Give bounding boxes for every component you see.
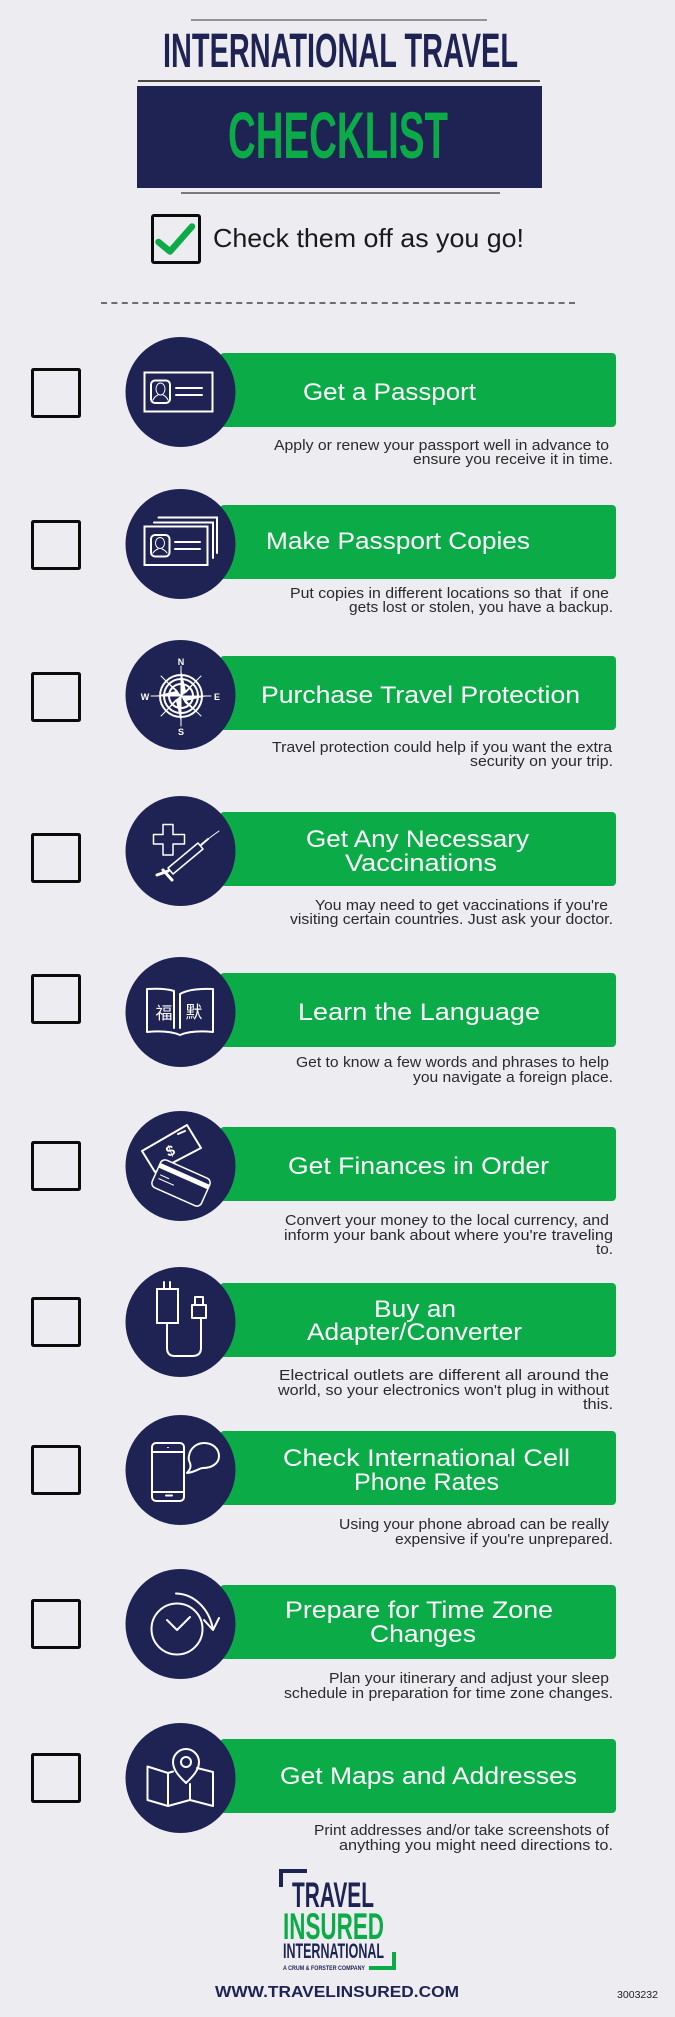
description: visiting certain countries. Just ask your doctor. bbox=[290, 911, 613, 928]
description: Travel protection could help if you want the extra bbox=[272, 739, 613, 756]
checkbox bbox=[32, 674, 80, 720]
description: You may need to get vaccinations if you're bbox=[315, 897, 608, 914]
item 10: get maps and addresses bbox=[32, 1723, 616, 1854]
icon: compass rose: N bbox=[178, 657, 184, 667]
checkbox bbox=[32, 976, 80, 1022]
description: inform your bank about where you're traveling bbox=[284, 1227, 613, 1244]
heading: Get Finances in Order bbox=[288, 1153, 549, 1180]
badge circle bbox=[126, 1267, 236, 1377]
heading: Buy an bbox=[374, 1296, 456, 1323]
green bar bbox=[220, 1431, 616, 1505]
checkbox bbox=[32, 1298, 80, 1346]
icon: banknote and credit card: $ bbox=[164, 1142, 178, 1161]
badge circle bbox=[126, 1569, 236, 1679]
title banner: checklist: CHECKLIST bbox=[228, 98, 448, 172]
description: expensive if you're unprepared. bbox=[395, 1531, 613, 1548]
badge circle bbox=[126, 957, 236, 1067]
checkbox bbox=[32, 834, 80, 882]
icon: open phrase book bbox=[147, 989, 213, 1035]
green bar bbox=[220, 353, 616, 427]
item 8: check international cell phone rates: Phone Rates bbox=[354, 1469, 499, 1496]
badge circle bbox=[126, 337, 236, 447]
icon: charger and cable bbox=[157, 1282, 206, 1356]
heading: Check International Cell bbox=[283, 1445, 570, 1472]
heading: Learn the Language bbox=[298, 999, 540, 1026]
icon: stacked passport cards bbox=[144, 518, 217, 565]
description: Using your phone abroad can be really bbox=[339, 1516, 610, 1533]
logo: travel insured international: TRAVEL bbox=[292, 1876, 374, 1915]
checkbox bbox=[32, 522, 80, 568]
green bar bbox=[220, 812, 616, 886]
logo: travel insured international: INTERNATIONAL bbox=[283, 1940, 384, 1963]
description: anything you might need directions to. bbox=[339, 1837, 613, 1854]
heading: Get Maps and Addresses bbox=[280, 1763, 577, 1790]
icon: compass rose: S bbox=[178, 727, 184, 737]
description: this. bbox=[583, 1396, 613, 1413]
instruction text: Check them off as you go! bbox=[213, 223, 524, 253]
item 4: get any necessary vaccinations bbox=[32, 796, 616, 928]
checkbox bbox=[32, 1142, 80, 1190]
item 1: get a passport bbox=[32, 337, 616, 468]
icon: phone and speech bubble bbox=[152, 1443, 219, 1501]
icon: open phrase book: 默 bbox=[186, 1003, 202, 1022]
icon: map and pin bbox=[148, 1749, 213, 1806]
badge circle bbox=[126, 640, 236, 750]
checkbox bbox=[32, 1446, 80, 1494]
icon: banknote and credit card bbox=[142, 1125, 212, 1208]
description: schedule in preparation for time zone changes. bbox=[284, 1685, 613, 1702]
item 3: purchase travel protection bbox=[32, 640, 616, 770]
description: Get to know a few words and phrases to help bbox=[296, 1054, 609, 1071]
item 7: buy an adapter/converter: Adapter/Converter bbox=[307, 1319, 522, 1346]
green bar bbox=[220, 656, 616, 730]
description: Apply or renew your passport well in advance to bbox=[274, 437, 609, 454]
badge circle bbox=[126, 489, 236, 599]
checkbox bbox=[32, 1600, 80, 1648]
heading: Get a Passport bbox=[303, 379, 476, 406]
description bbox=[314, 1822, 613, 1854]
icon: compass rose bbox=[141, 657, 220, 737]
logo: travel insured international: A CRUM & FORSTER COMPANY bbox=[283, 1965, 366, 1972]
item 6: get finances in order bbox=[32, 1111, 616, 1258]
green bar bbox=[220, 973, 616, 1047]
reference code: 3003232 bbox=[617, 1989, 658, 2001]
checkbox bbox=[32, 1754, 80, 1802]
item 9: prepare for time zone changes bbox=[32, 1569, 616, 1702]
description bbox=[290, 585, 613, 616]
green bar bbox=[220, 505, 616, 579]
badge circle bbox=[126, 1723, 236, 1833]
item 9: prepare for time zone changes: Changes bbox=[370, 1621, 476, 1648]
icon: clock with arrow bbox=[152, 1594, 219, 1654]
icon: medical cross and syringe bbox=[154, 824, 219, 880]
description bbox=[284, 1670, 613, 1702]
checkbox bbox=[32, 370, 80, 416]
heading: Make Passport Copies bbox=[266, 528, 530, 555]
logo: travel insured international: INSURED bbox=[283, 1906, 384, 1947]
description bbox=[339, 1516, 613, 1548]
icon: passport card bbox=[144, 372, 212, 412]
icon: open phrase book: 福 bbox=[156, 1004, 172, 1023]
description: world, so your electronics won't plug in without bbox=[277, 1382, 610, 1399]
icon: checked box bbox=[152, 216, 200, 262]
green bar bbox=[220, 1127, 616, 1201]
description: Put copies in different locations so that if one bbox=[290, 585, 609, 602]
green bar bbox=[220, 1283, 616, 1357]
heading: Get Any Necessary bbox=[306, 826, 529, 853]
green bar bbox=[220, 1739, 616, 1813]
description: Print addresses and/or take screenshots of bbox=[314, 1822, 610, 1839]
item 2: make passport copies bbox=[32, 489, 616, 616]
item 8: check international cell phone rates bbox=[32, 1415, 616, 1548]
badge circle bbox=[126, 1111, 236, 1221]
item 4: get any necessary vaccinations: Vaccinations bbox=[345, 850, 497, 877]
description bbox=[277, 1367, 613, 1413]
description: Electrical outlets are different all around the bbox=[279, 1367, 609, 1384]
logo: travel insured international bbox=[279, 1869, 396, 1972]
icon: compass rose: E bbox=[214, 692, 220, 702]
title banner: checklist bbox=[137, 86, 542, 188]
website url: WWW.TRAVELINSURED.COM bbox=[215, 1984, 459, 2001]
item 5: learn the language bbox=[32, 957, 616, 1086]
icon: compass rose: W bbox=[141, 692, 150, 702]
description: Plan your itinerary and adjust your sleep bbox=[329, 1670, 609, 1687]
description: you navigate a foreign place. bbox=[413, 1069, 613, 1086]
description: ensure you receive it in time. bbox=[413, 451, 613, 468]
green bar bbox=[220, 1585, 616, 1659]
badge circle bbox=[126, 1415, 236, 1525]
description: gets lost or stolen, you have a backup. bbox=[349, 599, 613, 616]
description: Convert your money to the local currency, and bbox=[285, 1212, 609, 1229]
heading: Purchase Travel Protection bbox=[261, 682, 580, 709]
description: to. bbox=[596, 1241, 613, 1258]
item 7: buy an adapter/converter bbox=[32, 1267, 616, 1413]
badge circle bbox=[126, 796, 236, 906]
description bbox=[284, 1212, 613, 1258]
description: security on your trip. bbox=[470, 753, 613, 770]
description bbox=[290, 897, 613, 928]
description bbox=[296, 1054, 613, 1086]
description bbox=[272, 739, 613, 770]
description bbox=[274, 437, 613, 468]
heading: Prepare for Time Zone bbox=[285, 1597, 553, 1624]
